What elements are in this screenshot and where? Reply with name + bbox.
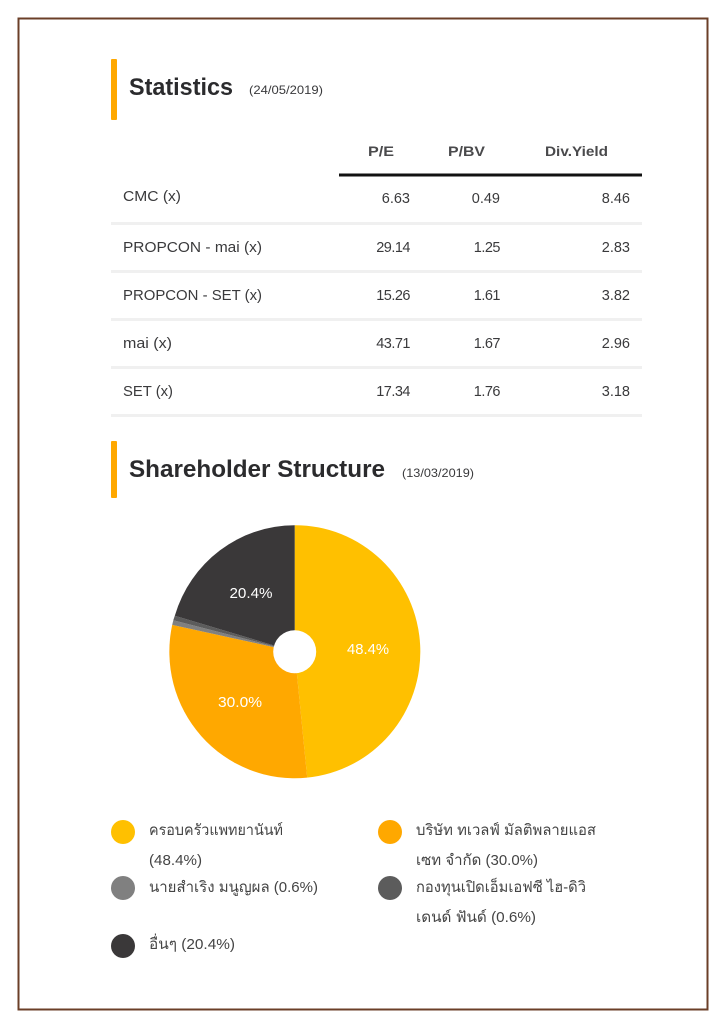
table header row: P/E: [368, 143, 394, 159]
row: mai: 2.96: [602, 336, 630, 352]
row: PROPCON - SET: [123, 288, 630, 304]
pie centre hole: [273, 630, 316, 673]
statistics table: [111, 143, 642, 417]
row: CMC: 6.63: [382, 191, 410, 207]
slice: 48.4%: [295, 525, 420, 778]
slice: 0.6%: [172, 620, 295, 652]
legend item: family: ครอบครัวแพทยานันท์: [149, 822, 283, 839]
table header row: P/BV: [448, 143, 486, 159]
legend item: fund: [378, 876, 586, 926]
heading: shareholder structure: (13/03/2019): [402, 466, 474, 480]
row: SET: SET (x): [123, 384, 173, 400]
table header row: Div.Yield: [545, 143, 608, 159]
legend item: individual: นายสำเริง มนูญผล (0.6%): [149, 879, 318, 896]
row: PROPCON - mai: [123, 240, 630, 256]
legend item: family: (48.4%): [149, 852, 202, 869]
row: CMC: [123, 189, 630, 207]
row: PROPCON - mai: PROPCON - mai (x): [123, 240, 262, 256]
legend item: individual: [111, 876, 318, 900]
row: PROPCON - mai: 2.83: [602, 240, 630, 256]
pie chart: [169, 525, 420, 778]
row: PROPCON - mai: 1.25: [474, 240, 500, 256]
legend item: fund: เดนด์ ฟันด์ (0.6%): [416, 909, 536, 926]
legend item: company: เซท จำกัด (30.0%): [416, 852, 538, 869]
row: PROPCON - SET: 1.61: [474, 288, 500, 304]
slice: 0.6% second: [173, 616, 295, 652]
row: SET: 1.76: [474, 384, 500, 400]
row: SET: 3.18: [602, 384, 630, 400]
pie label: 30.0%: 30.0%: [218, 694, 262, 711]
legend item: company: บริษัท ทเวลฟ์ มัลติพลายแอส: [416, 822, 596, 839]
heading: statistics: Statistics: [129, 74, 233, 101]
pie label: 48.4%: 48.4%: [347, 641, 389, 658]
legend: [111, 820, 596, 958]
legend item: company: [378, 820, 596, 869]
legend item: fund: กองทุนเปิดเอ็มเอฟซี ไฮ-ดิวิ: [416, 877, 586, 897]
row: PROPCON - SET: PROPCON - SET (x): [123, 288, 262, 304]
legend item: family: [111, 820, 283, 869]
row: mai: mai (x): [123, 336, 172, 352]
table header row: [339, 143, 642, 176]
row: PROPCON - mai: 29.14: [376, 240, 410, 256]
pie label: 20.4%: 20.4%: [230, 585, 272, 602]
row: mai: 43.71: [376, 336, 410, 352]
row: PROPCON - SET: 15.26: [376, 288, 410, 304]
slice: 30.0%: [169, 625, 307, 778]
row: CMC: 0.49: [472, 191, 500, 207]
row: mai: [123, 336, 630, 352]
row: SET: [123, 384, 630, 400]
row: SET: 17.34: [376, 384, 410, 400]
heading: shareholder structure: [111, 441, 474, 498]
row: mai: 1.67: [474, 336, 500, 352]
row: PROPCON - SET: 3.82: [602, 288, 630, 304]
heading: shareholder structure: Shareholder Structure: [129, 456, 385, 483]
heading: statistics: (24/05/2019): [249, 83, 323, 97]
legend item: others: [111, 933, 235, 958]
legend item: others: อื่นๆ (20.4%): [149, 933, 235, 953]
row: CMC: CMC (x): [123, 189, 181, 205]
slice: 20.4%: [175, 525, 295, 652]
heading: statistics: [111, 59, 323, 120]
row: CMC: 8.46: [602, 191, 630, 207]
